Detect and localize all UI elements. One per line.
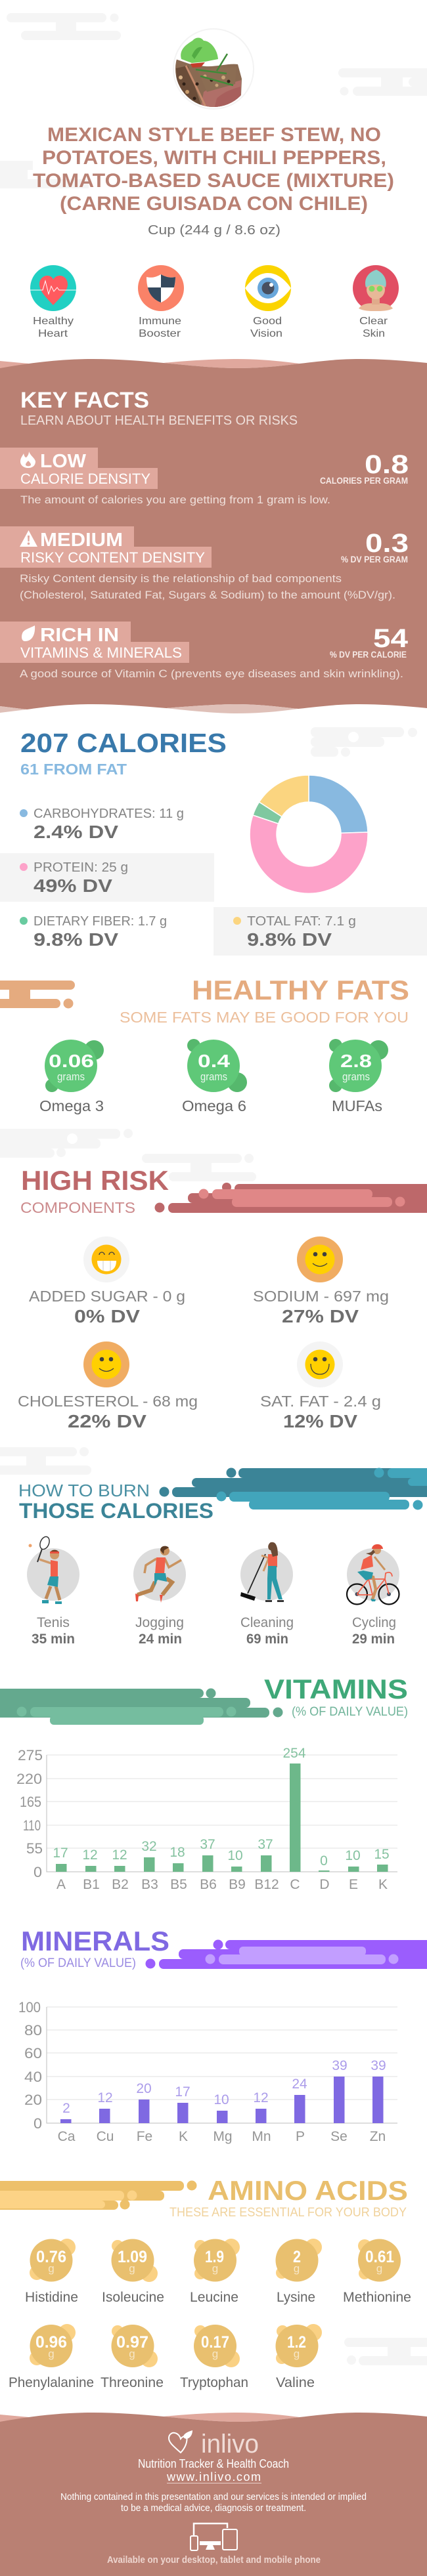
bar chart: minerals: 39 (371, 2058, 386, 2073)
heading: calories: 207 CALORIES (20, 728, 227, 758)
bar chart: vitamins: 12 (82, 1848, 98, 1863)
fact: rich in vitamins and minerals: RICH IN (40, 625, 119, 646)
activity labels: 24 min (139, 1632, 182, 1647)
amino: histidine (25, 2239, 78, 2305)
activity labels: 29 min (352, 1632, 395, 1647)
amino: methionine (343, 2239, 411, 2305)
icon: immune booster (138, 265, 184, 311)
subheading: from fat: 61 FROM FAT (20, 761, 127, 778)
bar chart: minerals: 100 (18, 1999, 41, 2016)
bar chart: vitamins: B9 (229, 1877, 246, 1892)
amino: tryptophan (180, 2325, 248, 2390)
risk: saturated fat: 12% DV (283, 1411, 357, 1431)
fat: mufas: MUFAs (332, 1097, 382, 1114)
amino: lysine: 2 (293, 2248, 301, 2266)
amino: phenylalanine (9, 2324, 94, 2390)
icon: good vision (245, 265, 291, 311)
bar chart: vitamins: 110 (23, 1817, 41, 1834)
amino: leucine (190, 2239, 240, 2305)
disclaimer: Nothing contained in this presentation and our services is intended or implied (60, 2491, 367, 2502)
bar chart: vitamins: 15 (374, 1847, 390, 1862)
fact: medium risky content density: RISKY CONTENT DENSITY (20, 549, 205, 566)
risk: cholesterol: CHOLESTEROL - 68 mg (18, 1393, 198, 1410)
decorative bars: minerals (146, 1940, 427, 1969)
bar chart: vitamins: 37 (200, 1837, 215, 1852)
fat: omega 6: grams (200, 1070, 227, 1083)
fact: rich in vitamins and minerals (0, 622, 409, 680)
icon labels: Immune (139, 316, 181, 327)
macro: carbohydrates: CARBOHYDRATES: 11 g (34, 807, 184, 821)
macro: carbohydrates (20, 807, 184, 842)
fat: omega 6: 0.4 (198, 1051, 231, 1071)
amino: histidine: g (48, 2262, 55, 2275)
icon labels: Heart (38, 328, 68, 339)
fact: low calorie density: LOW (40, 451, 87, 472)
amino: threonine: 0.97 (116, 2333, 148, 2352)
bar chart: vitamins: 10 (345, 1848, 361, 1863)
heading: high risk: HIGH RISK (21, 1165, 169, 1196)
fact: medium risky content density: (Cholesterol, Saturated Fat, Sugars & Sodium) to the amount (%DV/gr). (20, 589, 395, 601)
heading: those calories: THOSE CALORIES (19, 1499, 214, 1523)
fact: low calorie density: The amount of calories you are getting from 1 gram is low. (20, 494, 330, 506)
bar chart: vitamins: B12 (254, 1877, 279, 1892)
macro: protein: PROTEIN: 25 g (34, 860, 128, 875)
bar chart: vitamins: 12 (112, 1848, 127, 1863)
amino: valine: Valine (276, 2375, 315, 2390)
title: MEXICAN STYLE BEEF STEW, NO (47, 124, 381, 146)
activity labels: 35 min (32, 1632, 75, 1647)
decorative bars: vitamins (0, 1688, 282, 1725)
fat: omega 3 (39, 1040, 104, 1114)
amino: valine (276, 2324, 322, 2390)
fact: low calorie density: CALORIES PER GRAM (320, 476, 408, 486)
fact: medium risky content density: Risky Content density is the relationship of bad components (20, 572, 342, 585)
amino: threonine: Threonine (101, 2375, 164, 2390)
amino: leucine: Leucine (190, 2290, 238, 2305)
bar chart: vitamins: 37 (258, 1837, 273, 1852)
bar chart: minerals (18, 1999, 397, 2144)
amino: threonine (101, 2325, 164, 2390)
bar chart: vitamins: B1 (83, 1877, 100, 1892)
risk: sodium: SODIUM - 697 mg (253, 1288, 389, 1305)
fact: low calorie density: 0.8 (365, 450, 409, 479)
fat: mufas: 2.8 (340, 1051, 372, 1071)
risk: added sugar (29, 1236, 185, 1326)
risk: sodium (253, 1236, 389, 1326)
macro: dietary fiber: 9.8% DV (34, 929, 118, 950)
disclaimer (60, 2491, 367, 2514)
bar chart: vitamins: 220 (16, 1771, 42, 1787)
bar chart: vitamins: B6 (200, 1877, 217, 1892)
fact: medium risky content density (0, 526, 409, 601)
amino: valine: g (294, 2348, 300, 2360)
activity: jogging (133, 1546, 186, 1603)
bar chart: vitamins: 18 (169, 1845, 185, 1860)
bar chart: vitamins: 165 (20, 1794, 41, 1810)
macro: carbohydrates: 2.4% DV (34, 822, 118, 842)
fact: rich in vitamins and minerals: % DV PER CALORIE (330, 650, 407, 660)
macro: total fat (233, 914, 356, 950)
decorative bars: burn calories (159, 1467, 427, 1510)
heading: healthy fats: HEALTHY FATS (192, 975, 409, 1005)
macro: total fat: 9.8% DV (247, 929, 332, 950)
title: POTATOES, WITH CHILI PEPPERS, (42, 147, 386, 169)
macro: protein (20, 860, 128, 896)
amino: lysine: g (294, 2262, 300, 2275)
fact: medium risky content density: % DV PER GRAM (341, 555, 408, 564)
bar chart: minerals: 39 (332, 2058, 348, 2073)
fat: omega 3: 0.06 (49, 1051, 94, 1071)
fact: rich in vitamins and minerals: A good source of Vitamin C (prevents eye diseases and skin wrinkling). (20, 667, 403, 680)
panel: footer (0, 2413, 427, 2576)
disclaimer: to be a medical advice, diagnosis or treatment. (121, 2502, 306, 2514)
bar chart: vitamins: 17 (53, 1846, 68, 1861)
icon labels: Booster (139, 328, 181, 339)
amino: isoleucine: 1.09 (118, 2248, 147, 2266)
fact: medium risky content density: 0.3 (365, 529, 409, 558)
fat: omega 3: grams (57, 1070, 85, 1083)
amino: valine: 1.2 (287, 2333, 306, 2352)
legend rows (0, 853, 214, 902)
bar chart: vitamins: 32 (141, 1839, 157, 1854)
decorative bars: healthy fats (0, 981, 75, 1008)
bar chart: minerals: 20 (136, 2081, 152, 2096)
tagline: Nutrition Tracker & Health Coach (138, 2457, 289, 2470)
bar chart: minerals: Zn (370, 2129, 386, 2144)
amino: isoleucine (102, 2239, 164, 2305)
icon labels: Skin (363, 328, 385, 339)
bar chart: minerals: Ca (58, 2129, 76, 2144)
amino: isoleucine: g (129, 2262, 135, 2275)
bar chart: vitamins: B5 (170, 1877, 187, 1892)
amino: methionine: 0.61 (365, 2248, 394, 2266)
bar chart: vitamins: 0 (320, 1853, 328, 1869)
bar chart: vitamins: 254 (282, 1746, 306, 1761)
bar chart: minerals: 2 (62, 2101, 70, 2116)
heading: minerals: MINERALS (21, 1926, 169, 1956)
heading: vitamins: VITAMINS (264, 1674, 408, 1704)
fact: rich in vitamins and minerals: VITAMINS & MINERALS (20, 644, 182, 661)
activity labels: Cleaning (240, 1615, 294, 1630)
fact: low calorie density: CALORIE DENSITY (20, 471, 150, 487)
bar chart: vitamins: 275 (18, 1747, 43, 1763)
bar chart: vitamins: B2 (112, 1877, 129, 1892)
amino: phenylalanine: 0.96 (35, 2333, 67, 2352)
bar chart: vitamins: 55 (26, 1840, 43, 1857)
bar chart: minerals: 12 (253, 2090, 269, 2105)
decorative bars: high risk (155, 1183, 427, 1213)
bar chart: minerals: Fe (137, 2129, 152, 2144)
title (33, 124, 394, 215)
amino: lysine: Lysine (277, 2290, 315, 2305)
amino: tryptophan: g (212, 2348, 218, 2360)
decorative bars: amino acids (0, 2180, 197, 2210)
subheading: components: COMPONENTS (20, 1199, 135, 1216)
amino: tryptophan: Tryptophan (180, 2375, 248, 2390)
activity: tennis (27, 1535, 79, 1604)
fact: rich in vitamins and minerals: 54 (373, 624, 409, 653)
bar chart: vitamins (16, 1746, 397, 1892)
icon: devices (191, 2523, 237, 2550)
title: (CARNE GUISADA CON CHILE) (60, 193, 368, 215)
amino: histidine: 0.76 (36, 2248, 66, 2266)
bar chart: vitamins: 10 (227, 1848, 243, 1863)
bar chart: minerals: 24 (292, 2077, 307, 2092)
risk: cholesterol: 22% DV (68, 1411, 146, 1431)
icon labels: Healthy (33, 316, 74, 327)
amino: methionine: Methionine (343, 2290, 411, 2305)
amino: leucine: g (212, 2262, 218, 2275)
amino: lysine (276, 2239, 322, 2305)
logo: inlivo: inlivo (201, 2430, 259, 2459)
macro: dietary fiber (20, 914, 167, 950)
subheading: minerals: (% OF DAILY VALUE) (20, 1956, 136, 1970)
fat: omega 6 (182, 1039, 247, 1114)
availability note: Available on your desktop, tablet and mobile phone (107, 2554, 321, 2565)
bar chart: minerals: Mn (252, 2129, 271, 2144)
activity: cycling (347, 1544, 399, 1604)
fat: mufas (329, 1039, 388, 1114)
amino: phenylalanine: Phenylalanine (9, 2375, 94, 2390)
bar chart: minerals: 20 (24, 2092, 42, 2108)
bar chart: vitamins: B3 (141, 1877, 158, 1892)
panel: key facts (0, 359, 427, 713)
bar chart: minerals: 40 (24, 2069, 42, 2085)
heading: how to burn: HOW TO BURN (18, 1481, 150, 1500)
icon labels: Vision (250, 328, 282, 339)
amino: histidine: Histidine (25, 2290, 78, 2305)
amino: leucine: 1.9 (205, 2248, 224, 2266)
subheading: amino acids: THESE ARE ESSENTIAL FOR YOUR BODY (169, 2205, 407, 2220)
activity labels (32, 1615, 396, 1647)
title: TOMATO-BASED SAUCE (MIXTURE) (33, 170, 394, 192)
bar chart: minerals: 60 (24, 2045, 42, 2061)
icon labels: Good (253, 316, 282, 327)
donut chart (250, 775, 368, 893)
heading: key facts: KEY FACTS (20, 388, 149, 413)
risk: saturated fat (260, 1341, 381, 1431)
macro: dietary fiber: DIETARY FIBER: 1.7 g (34, 914, 167, 929)
risk: sodium: 27% DV (282, 1306, 359, 1326)
subheading: healthy fats: SOME FATS MAY BE GOOD FOR YOU (120, 1009, 409, 1026)
amino: threonine: g (129, 2348, 135, 2360)
icon: clear skin (353, 265, 399, 311)
bar chart: minerals: Cu (97, 2129, 114, 2144)
activity labels: Jogging (135, 1615, 184, 1630)
bar chart: minerals: Mg (213, 2129, 233, 2144)
website link: www.inlivo.com (166, 2470, 261, 2483)
macro: protein: 49% DV (34, 876, 112, 896)
bar chart: vitamins: A (56, 1877, 66, 1892)
fat: mufas: grams (342, 1070, 370, 1083)
macro: total fat: TOTAL FAT: 7.1 g (247, 914, 356, 929)
subheading: LEARN ABOUT HEALTH BENEFITS OR RISKS (20, 413, 298, 428)
bar chart: minerals: 12 (97, 2090, 113, 2105)
bar chart: minerals: Se (330, 2129, 348, 2144)
bar chart: vitamins: E (349, 1877, 358, 1892)
logo: inlivo (169, 2430, 259, 2459)
activity labels: Cycling (352, 1615, 396, 1630)
amino: isoleucine: Isoleucine (102, 2290, 164, 2305)
activity labels: 69 min (246, 1632, 288, 1647)
risk: added sugar: 0% DV (74, 1306, 140, 1326)
heading: amino acids: AMINO ACIDS (208, 2175, 408, 2206)
risk: saturated fat: SAT. FAT - 2.4 g (260, 1393, 381, 1410)
icon: healthy heart (30, 265, 76, 311)
bar chart: minerals: 17 (175, 2084, 191, 2100)
fat: omega 3: Omega 3 (39, 1097, 104, 1114)
bar chart: minerals: P (296, 2129, 305, 2144)
serving size: Cup (244 g / 8.6 oz) (148, 223, 281, 238)
bar chart: vitamins: K (378, 1877, 388, 1892)
amino: methionine: g (376, 2262, 382, 2275)
bar chart: minerals: 10 (214, 2092, 229, 2107)
icon labels: Clear (359, 316, 388, 327)
risk: cholesterol (18, 1341, 198, 1431)
bar chart: minerals: 80 (24, 2022, 42, 2038)
amino: phenylalanine: g (48, 2348, 55, 2360)
fat: omega 6: Omega 6 (182, 1097, 246, 1114)
subheading: vitamins: (% OF DAILY VALUE) (292, 1705, 408, 1719)
bar chart: minerals: K (179, 2129, 188, 2144)
icon labels (33, 316, 388, 339)
food photo (172, 29, 254, 112)
activity labels: Tenis (37, 1615, 70, 1630)
fact: medium risky content density: MEDIUM (40, 530, 123, 551)
bar chart: vitamins: D (319, 1877, 330, 1892)
bar chart: vitamins: C (290, 1877, 300, 1892)
amino: tryptophan: 0.17 (201, 2333, 229, 2352)
risk: added sugar: ADDED SUGAR - 0 g (29, 1288, 185, 1305)
bar chart: vitamins: 0 (34, 1864, 42, 1880)
bar chart: minerals: 0 (34, 2115, 42, 2132)
fact: low calorie density (0, 448, 409, 506)
activity: cleaning (240, 1542, 293, 1602)
